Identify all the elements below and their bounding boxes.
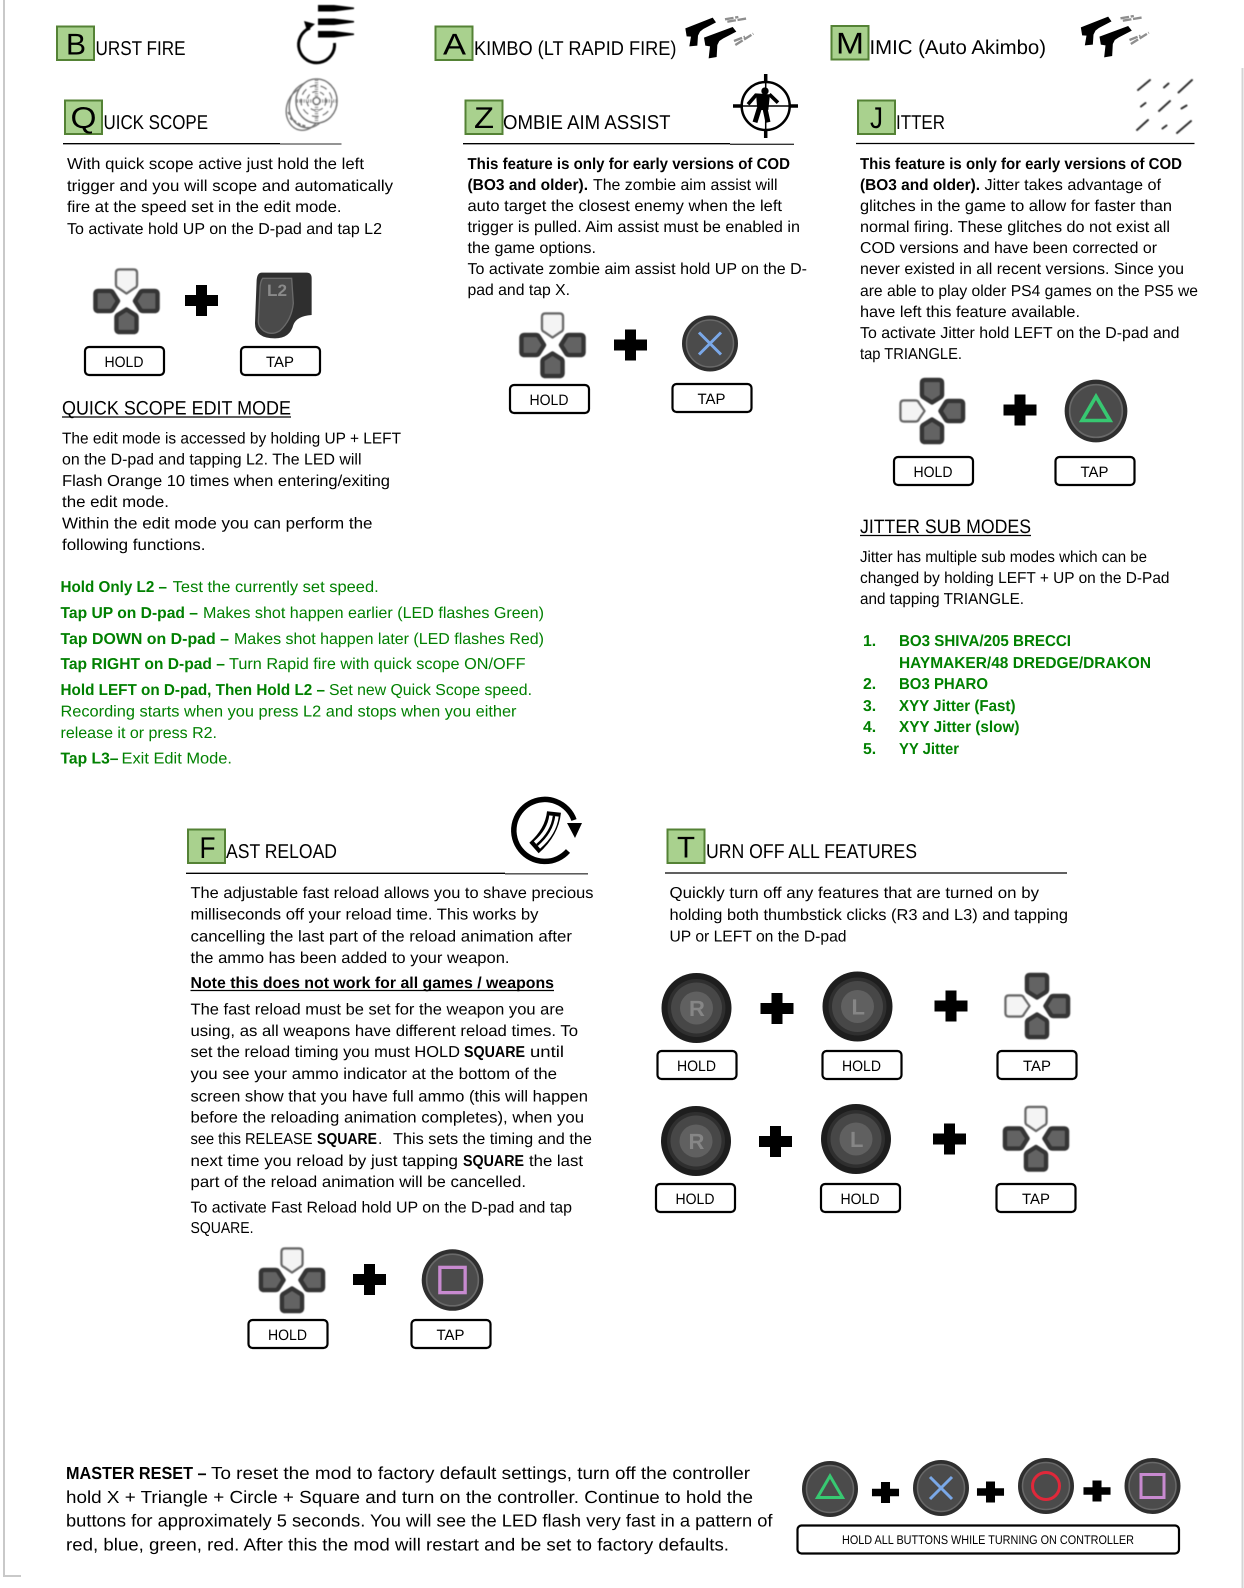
heading: jitter: J: [870, 102, 883, 135]
text: fast reload instructions: part of the reload animation will be cancelled.: [190, 1174, 526, 1191]
text: fast reload intro: milliseconds off your reload time. This works by: [190, 906, 539, 924]
text: fast reload instructions: SQUARE: [464, 1044, 525, 1061]
label: hold: [821, 1184, 900, 1212]
label: hold: [822, 1051, 902, 1079]
text: edit mode description: on the D-pad and tapping L2. The LED will: [62, 452, 362, 469]
text: fast reload intro: [190, 885, 594, 967]
label: tap: TAP: [1022, 1191, 1050, 1208]
label: hold: [656, 1184, 735, 1212]
heading: jitter: ITTER: [896, 112, 945, 134]
label: tap: TAP: [698, 391, 726, 408]
text: jitter description: (BO3 and older).: [860, 177, 980, 194]
text: master reset instructions: [66, 1463, 773, 1554]
heading: turn off all features: URN OFF ALL FEATURES: [706, 841, 917, 863]
icon: plus: [614, 330, 647, 360]
text: fast reload instructions: using, as all weapons have different reload times. To: [190, 1023, 578, 1040]
label: hold: [248, 1320, 328, 1348]
icon: L2 trigger: [255, 273, 312, 338]
text: edit mode functions: [60, 579, 544, 768]
label: hold: HOLD: [842, 1058, 881, 1075]
text: jitter description: Jitter takes advantage of: [984, 177, 1162, 194]
heading: quick scope edit mode: QUICK SCOPE EDIT MODE: [62, 398, 291, 420]
label: hold: [510, 385, 589, 413]
list: jitter modes: 5.: [863, 741, 876, 758]
text: zombie aim assist description: trigger is pulled. Aim assist must be enabled in: [468, 219, 800, 236]
text: fast reload instructions: the last: [529, 1153, 584, 1170]
text: jitter description: normal firing. These glitches do not exist all: [860, 219, 1170, 236]
label: tap: TAP: [436, 1327, 464, 1344]
text: jitter description: [860, 156, 1198, 363]
text: fast reload instructions: set the reload timing you must HOLD: [190, 1044, 460, 1061]
label: hold: HOLD: [104, 354, 144, 371]
label: tap: [998, 1051, 1076, 1079]
icon: square button: [422, 1249, 483, 1311]
list: jitter modes: 4.: [863, 719, 876, 736]
text: fast reload instructions: SQUARE.: [190, 1220, 254, 1237]
text: fast reload instructions: This sets the timing and the: [393, 1131, 592, 1148]
text: turn off description: [670, 885, 1068, 946]
heading: zombie aim assist: [463, 100, 794, 144]
panel: jitter: [856, 80, 1198, 485]
text: jitter description: are able to play older PS4 games on the PS5 we: [860, 283, 1198, 300]
text: edit mode functions: Tap UP on D-pad –: [60, 605, 198, 622]
heading: fast reload: [186, 830, 588, 874]
label: tap: [241, 347, 320, 375]
icon: plus: [933, 1124, 966, 1154]
text: fast reload instructions: screen show that you have full ammo (this will happen: [190, 1088, 588, 1106]
text: zombie aim assist description: the game options.: [468, 240, 596, 257]
heading: fast reload: F: [200, 832, 216, 865]
text: quick scope description: To activate hold UP on the D-pad and tap L2: [67, 221, 382, 238]
heading: turn off all features: T: [677, 832, 695, 864]
text: edit mode description: following functions.: [62, 537, 206, 554]
heading: zombie aim assist: Z: [474, 102, 494, 135]
text: edit mode description: [62, 430, 401, 554]
icon: circle button: [1018, 1458, 1074, 1514]
icon: R stick: [662, 973, 732, 1043]
text: edit mode functions: Recording starts when you press L2 and stops when you either: [60, 704, 516, 720]
label: tap: [996, 1184, 1076, 1212]
text: weapons note: Note this does not work for all games / weapons: [190, 975, 554, 992]
panel: jitter sub modes: [860, 516, 1170, 758]
label: hold: [85, 347, 164, 375]
heading: akimbo: [436, 26, 676, 62]
text: master reset instructions: red, blue, green, red. After this the mod will restart and be set to factory defaults.: [66, 1534, 729, 1554]
panel: mimic: [832, 16, 1149, 60]
heading: turn off all features: [665, 830, 1067, 873]
text: zombie aim assist description: [468, 156, 807, 299]
text: fast reload instructions: SQUARE: [463, 1153, 524, 1170]
heading: zombie aim assist: OMBIE AIM ASSIST: [503, 112, 670, 134]
text: jitter description: never existed in all recent versions. Since you: [860, 261, 1184, 278]
icon: plus: [934, 990, 968, 1022]
panel: quick scope: [63, 78, 393, 375]
label: tap: TAP: [266, 354, 294, 371]
text: fast reload instructions: before the reloading animation completes), when you: [190, 1110, 584, 1126]
heading: jitter sub modes: JITTER SUB MODES: [860, 516, 1031, 538]
row: R3 + L3 + up: [656, 1104, 1076, 1212]
text: quick scope description: trigger and you will scope and automatically: [67, 178, 393, 195]
text: fast reload instructions: [190, 1002, 592, 1237]
text: sub modes description: changed by holding LEFT + UP on the D-Pad: [860, 570, 1170, 587]
text: master reset instructions: To reset the mod to factory default settings, turn off the controller: [211, 1463, 750, 1483]
text: master reset instructions: hold X + Triangle + Circle + Square and turn on the controller. Continue to hold the: [66, 1487, 753, 1507]
icon: plus: [760, 993, 794, 1024]
heading: quick scope: Q: [70, 102, 96, 135]
icon: zombie in crosshair: [733, 74, 798, 138]
text: turn off description: holding both thumbstick clicks (R3 and L3) and tapping: [670, 907, 1068, 924]
text: quick scope description: fire at the speed set in the edit mode.: [67, 199, 342, 216]
panel: akimbo: [436, 17, 753, 61]
list: jitter modes: YY Jitter: [899, 741, 959, 758]
icon: plus: [1083, 1480, 1111, 1502]
label: hold: HOLD: [268, 1327, 307, 1344]
text: edit mode functions: Makes shot happen later (LED flashes Red): [234, 631, 544, 648]
icon: plus: [759, 1126, 792, 1157]
heading: burst fire: B: [66, 28, 86, 62]
list: jitter modes: 1.: [863, 633, 876, 650]
icon: plus: [353, 1264, 386, 1295]
label: hold: HOLD: [914, 464, 953, 481]
text: edit mode functions: release it or press R2.: [60, 725, 217, 742]
heading: jitter: [856, 100, 1194, 144]
text: edit mode description: Flash Orange 10 times when entering/exiting: [62, 473, 390, 490]
panel: quick scope edit mode: [60, 398, 544, 768]
label: hold: [658, 1051, 736, 1079]
icon: d-pad left: [900, 380, 963, 442]
text: zombie aim assist description: (BO3 and older).: [468, 177, 588, 194]
label: tap: [412, 1320, 490, 1348]
text: fast reload instructions: next time you reload by just tapping: [190, 1153, 458, 1170]
icon: d-pad up: [261, 1248, 323, 1311]
icon: plus: [872, 1482, 899, 1503]
text: edit mode functions: Set new Quick Scope speed.: [329, 682, 532, 699]
panel: burst fire: [57, 5, 354, 63]
text: sub modes description: [860, 549, 1170, 608]
label: hold: HOLD: [840, 1191, 880, 1208]
label: tap: [1056, 457, 1134, 485]
text: quick scope description: With quick scope active just hold the left: [67, 156, 365, 173]
text: edit mode functions: Hold LEFT on D-pad, Then Hold L2 –: [60, 682, 325, 699]
heading: burst fire: [57, 26, 186, 62]
text: edit mode functions: Tap DOWN on D-pad –: [60, 631, 229, 648]
icon: mimic pistols: [1081, 16, 1149, 57]
text: edit mode functions: Tap L3–: [60, 750, 119, 768]
heading: quick scope: [63, 100, 342, 144]
icon: scope reticle: [282, 78, 337, 134]
text: zombie aim assist description: auto target the closest enemy when the left: [468, 198, 783, 215]
icon: L stick: L: [850, 1127, 863, 1152]
text: fast reload instructions: The fast reload must be set for the weapon you are: [190, 1002, 564, 1018]
list: jitter modes: 2.: [863, 676, 876, 693]
heading: mimic: IMIC (Auto Akimbo): [870, 37, 1046, 59]
text: edit mode functions: Exit Edit Mode.: [122, 750, 232, 768]
icon: R stick: [661, 1106, 731, 1176]
icon: jitter bullet marks: [1137, 80, 1192, 133]
text: turn off description: Quickly turn off any features that are turned on by: [670, 885, 1039, 902]
text: fast reload instructions: until: [530, 1044, 564, 1061]
text: jitter description: glitches in the game to allow for faster than: [860, 198, 1172, 215]
row: R3 + L3 + left: [658, 972, 1076, 1079]
icon: triangle button: [802, 1461, 858, 1517]
icon: d-pad up: [522, 314, 584, 376]
icon: burst arrow and bullets: [299, 5, 354, 63]
label: tap: [672, 384, 752, 412]
icon: square button: [1124, 1458, 1180, 1514]
text: quick scope description: [67, 156, 393, 238]
heading: akimbo: KIMBO (LT RAPID FIRE): [474, 38, 676, 60]
icon: reload magazine: [514, 799, 582, 861]
icon: d-pad up: [1005, 1107, 1067, 1170]
text: jitter description: To activate Jitter hold LEFT on the D-pad and: [860, 325, 1180, 342]
icon: L stick: [821, 1104, 891, 1174]
text: fast reload instructions: SQUARE: [317, 1131, 377, 1148]
text: zombie aim assist description: The zombie aim assist will: [593, 177, 778, 194]
heading: fast reload: AST RELOAD: [226, 841, 337, 863]
icon: plus: [977, 1481, 1004, 1503]
heading: mimic: M: [836, 28, 864, 60]
text: jitter description: This feature is only for early versions of COD: [860, 156, 1182, 173]
label: hold: [894, 457, 973, 485]
text: fast reload instructions: To activate Fast Reload hold UP on the D-pad and tap: [190, 1200, 572, 1216]
text: zombie aim assist description: This feature is only for early versions of COD: [468, 156, 790, 173]
heading: mimic: [832, 26, 1046, 60]
icon: R stick: R: [689, 996, 705, 1021]
text: jitter description: tap TRIANGLE.: [860, 346, 962, 363]
label: hold all buttons: HOLD ALL BUTTONS WHILE TURNING ON CONTROLLER: [842, 1533, 1134, 1547]
icon: plus: [185, 285, 218, 316]
text: fast reload instructions: see this RELEASE: [190, 1131, 312, 1148]
icon: R stick: R: [688, 1129, 704, 1154]
icon: L2 trigger: L2: [267, 282, 287, 300]
icon: cross button: [682, 316, 738, 372]
icon: d-pad left: [1006, 975, 1068, 1037]
icon: akimbo pistols: [685, 17, 753, 58]
text: turn off description: UP or LEFT on the D-pad: [670, 928, 846, 946]
heading: quick scope: UICK SCOPE: [104, 112, 208, 134]
text: jitter description: COD versions and have been corrected or: [860, 240, 1157, 257]
heading: burst fire: URST FIRE: [96, 38, 186, 60]
text: fast reload intro: cancelling the last part of the reload animation after: [190, 928, 572, 946]
icon: cross button: [913, 1460, 969, 1516]
icon: L stick: L: [852, 994, 865, 1020]
list: jitter modes: BO3 SHIVA/205 BRECCI: [899, 633, 1071, 650]
text: zombie aim assist description: pad and tap X.: [468, 282, 570, 299]
icon: triangle button: [1065, 380, 1127, 442]
label: tap: TAP: [1080, 464, 1108, 481]
text: sub modes description: and tapping TRIANGLE.: [860, 591, 1024, 608]
text: edit mode description: The edit mode is accessed by holding UP + LEFT: [62, 430, 401, 448]
label: hold: HOLD: [676, 1191, 715, 1208]
text: edit mode functions: Tap RIGHT on D-pad –: [60, 656, 225, 673]
text: jitter description: have left this feature available.: [860, 304, 1080, 321]
list: jitter modes: XYY Jitter (slow): [899, 719, 1020, 736]
icon: L stick: [822, 972, 892, 1042]
heading: akimbo: A: [443, 28, 466, 62]
text: edit mode description: Within the edit mode you can perform the: [62, 516, 373, 532]
panel: turn off all features: [656, 830, 1076, 1212]
text: fast reload intro: The adjustable fast reload allows you to shave precious: [190, 885, 594, 902]
panel: zombie aim assist: [463, 74, 807, 413]
text: edit mode functions: Makes shot happen earlier (LED flashes Green): [203, 605, 544, 622]
label: hold: HOLD: [530, 392, 569, 409]
text: edit mode functions: Test the currently set speed.: [173, 579, 379, 596]
label: tap: TAP: [1023, 1058, 1051, 1075]
icon: plus: [1004, 394, 1036, 426]
text: fast reload intro: the ammo has been added to your weapon.: [190, 950, 510, 967]
text: sub modes description: Jitter has multiple sub modes which can be: [860, 549, 1147, 566]
list: jitter modes: XYY Jitter (Fast): [899, 698, 1016, 715]
panel: master reset: [66, 1458, 1180, 1554]
text: edit mode functions: Turn Rapid fire with quick scope ON/OFF: [229, 656, 526, 673]
list: jitter modes: HAYMAKER/48 DREDGE/DRAKON: [899, 655, 1151, 672]
list: jitter modes: 3.: [863, 698, 876, 715]
text: fast reload instructions: you see your ammo indicator at the bottom of the: [190, 1066, 557, 1083]
icon: d-pad up: [96, 270, 158, 332]
list: jitter modes: BO3 PHARO: [899, 676, 988, 693]
text: fast reload instructions: .: [378, 1131, 382, 1148]
list: jitter modes: [863, 633, 1151, 758]
text: master reset instructions: buttons for approximately 5 seconds. You will see the LED flash very fast in a pattern of: [66, 1510, 773, 1530]
label: hold: HOLD: [677, 1058, 716, 1075]
text: zombie aim assist description: To activate zombie aim assist hold UP on the D-: [468, 261, 807, 278]
text: edit mode description: the edit mode.: [62, 494, 169, 511]
text: edit mode functions: Hold Only L2 –: [60, 579, 167, 596]
text: master reset instructions: MASTER RESET –: [66, 1463, 207, 1483]
panel: fast reload: [186, 799, 594, 1348]
label: hold all buttons: [798, 1526, 1179, 1554]
